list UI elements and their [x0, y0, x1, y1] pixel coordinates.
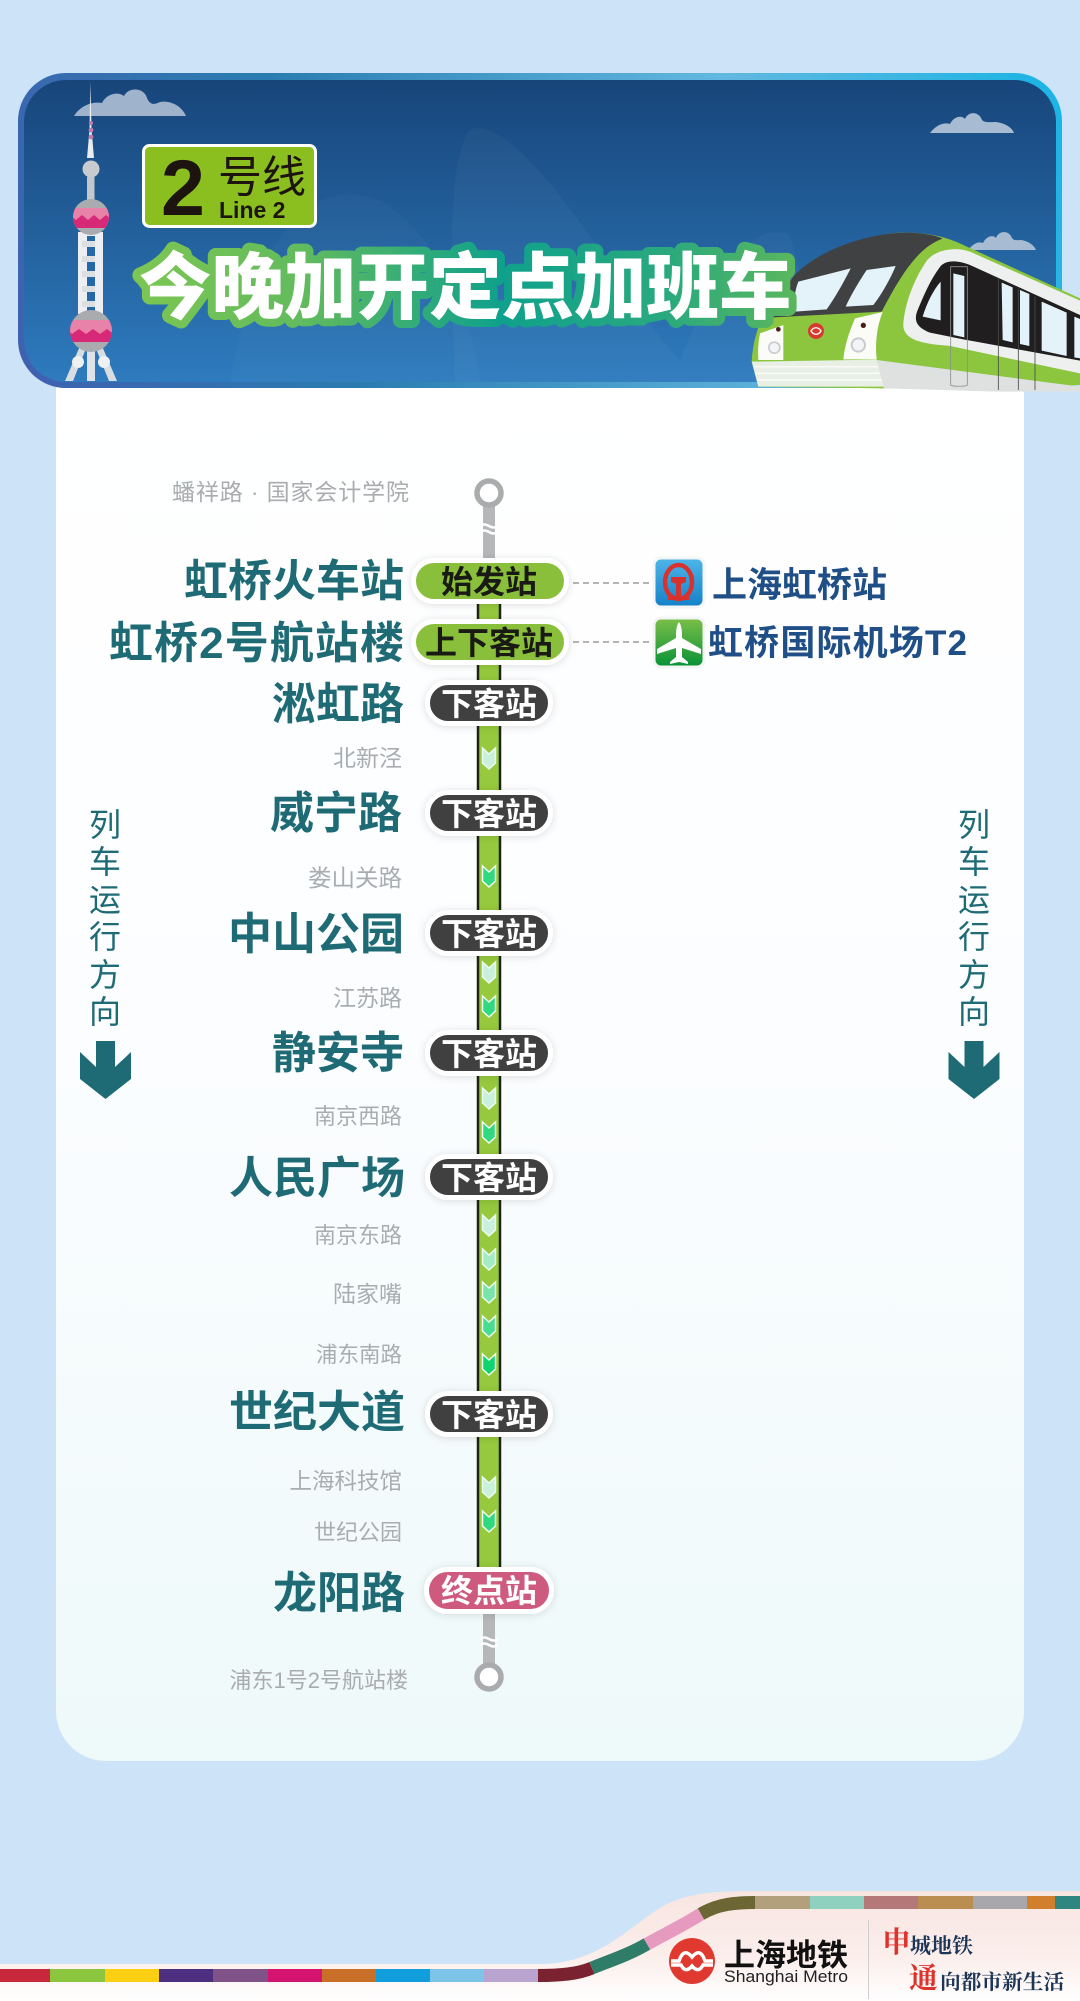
station: Hongqiao Railway: 始发站 — [441, 564, 537, 600]
badge: Line 2: Line 2 — [219, 197, 285, 223]
text: direction left: 向 — [89, 994, 121, 1030]
station: Hongqiao T2: 虹桥2号航站楼 — [109, 619, 404, 668]
station: Jing'an Temple — [272, 1029, 550, 1078]
text: direction right: 向 — [958, 994, 990, 1030]
text: direction left: 运 — [89, 882, 121, 918]
station: Songhong Rd — [272, 680, 550, 729]
station: Weining Rd: 下客站 — [441, 796, 537, 832]
icon: cloud left — [74, 89, 186, 116]
station: Century Avenue: 世纪大道 — [229, 1388, 405, 1437]
panel: route card — [56, 380, 1024, 1761]
station: Jing'an Temple: 静安寺 — [272, 1029, 404, 1078]
station: Longyang Rd: 终点站 — [441, 1573, 537, 1609]
label: East Nanjing Rd: 南京东路 — [314, 1223, 402, 1248]
footer: curved ribbon background — [0, 1891, 1080, 2001]
icon: cloud right middle — [968, 232, 1036, 250]
icon: airplane — [654, 618, 704, 667]
logo: Shanghai Metro: Shanghai Metro — [724, 1968, 848, 1986]
connector: railway station — [573, 582, 653, 584]
station: Songhong Rd: 淞虹路 — [272, 680, 404, 729]
slogan: 向都市新生活 — [940, 1971, 1064, 1994]
station: Hongqiao Railway: 虹桥火车站 — [184, 557, 404, 606]
text: direction right: 列 — [958, 807, 990, 843]
title: 今晚加开定点加班车 — [139, 248, 792, 329]
text: direction right: 行 — [958, 919, 990, 955]
station: Weining Rd: 威宁路 — [270, 789, 402, 838]
divider — [868, 1920, 869, 1999]
station: People's Square: 下客站 — [441, 1160, 537, 1196]
slogan — [882, 1926, 1064, 1995]
direction chevrons — [482, 748, 496, 1532]
station: Songhong Rd: 下客站 — [441, 686, 537, 722]
station: Zhongshan Park — [228, 910, 550, 959]
station: Century Avenue — [229, 1388, 550, 1437]
station: Zhongshan Park: 下客站 — [441, 916, 537, 952]
text: direction right: 车 — [958, 844, 990, 880]
label: Lujiazui: 陆家嘴 — [333, 1281, 402, 1307]
badge: Line 2: 号线 — [218, 153, 306, 202]
text: direction right: 运 — [958, 882, 990, 918]
text: direction right: 方 — [958, 957, 990, 993]
station: Hongqiao T2: 上下客站 — [425, 625, 553, 661]
text: Shanghai Hongqiao Station: 上海虹桥站 — [712, 566, 887, 605]
text: direction right — [958, 807, 990, 1030]
label: West Nanjing Rd: 南京西路 — [314, 1104, 402, 1129]
text: direction left: 行 — [89, 919, 121, 955]
text: direction left: 方 — [89, 957, 121, 993]
station: Jing'an Temple: 下客站 — [441, 1036, 537, 1072]
label: Jiangsu Rd: 江苏路 — [333, 985, 402, 1011]
slogan: 通 — [909, 1962, 938, 1995]
station: People's Square: 人民广场 — [229, 1154, 405, 1203]
text: direction left: 车 — [89, 844, 121, 880]
station: Longyang Rd: 龙阳路 — [273, 1569, 405, 1618]
text: Hongqiao Airport T2: 虹桥国际机场T2 — [708, 624, 967, 663]
label: Pudong airport: 浦东1号2号航站楼 — [230, 1668, 408, 1693]
station: Zhongshan Park: 中山公园 — [228, 910, 404, 959]
label: Science and Technology Museum: 上海科技馆 — [289, 1469, 402, 1494]
arrow: direction left — [80, 1041, 131, 1099]
arrow: direction right — [948, 1041, 1000, 1099]
station: Hongqiao T2 — [109, 619, 566, 668]
panel: header banner — [18, 73, 1062, 388]
station: People's Square — [229, 1154, 550, 1203]
label: first station: 蟠祥路 · 国家会计学院 — [172, 479, 409, 505]
badge: Line 2: 2 — [161, 143, 205, 232]
station: Longyang Rd — [273, 1569, 552, 1618]
label: Beixinjing: 北新泾 — [333, 745, 402, 771]
text: direction left: 列 — [89, 807, 121, 843]
label: Pudong South Rd: 浦东南路 — [316, 1343, 402, 1367]
label: Century Park: 世纪公园 — [314, 1520, 402, 1545]
station: Weining Rd — [270, 789, 550, 838]
logo: Shanghai Metro — [669, 1938, 848, 1986]
station: Century Avenue: 下客站 — [441, 1397, 537, 1433]
track: gray end segment — [477, 1612, 501, 1689]
label: Loushanguan Rd: 娄山关路 — [308, 865, 402, 891]
badge: Line 2 — [144, 143, 316, 232]
icon: Oriental Pearl tower — [65, 82, 117, 381]
icon: cloud right top — [930, 113, 1014, 133]
track: gray start segment — [477, 481, 501, 560]
connector: airport — [573, 641, 653, 643]
logo: Shanghai Metro: 上海地铁 — [724, 1938, 848, 1973]
text: direction left — [89, 807, 121, 1030]
icon: railway logo — [654, 558, 704, 607]
station: Hongqiao Railway — [184, 557, 566, 606]
slogan: 城地铁 — [910, 1934, 973, 1958]
track: line 2 green — [478, 600, 500, 1572]
slogan: 申 — [882, 1926, 911, 1959]
illustration: metro train — [752, 233, 1080, 392]
footer: metro line colour ribbon — [0, 1896, 1080, 1982]
